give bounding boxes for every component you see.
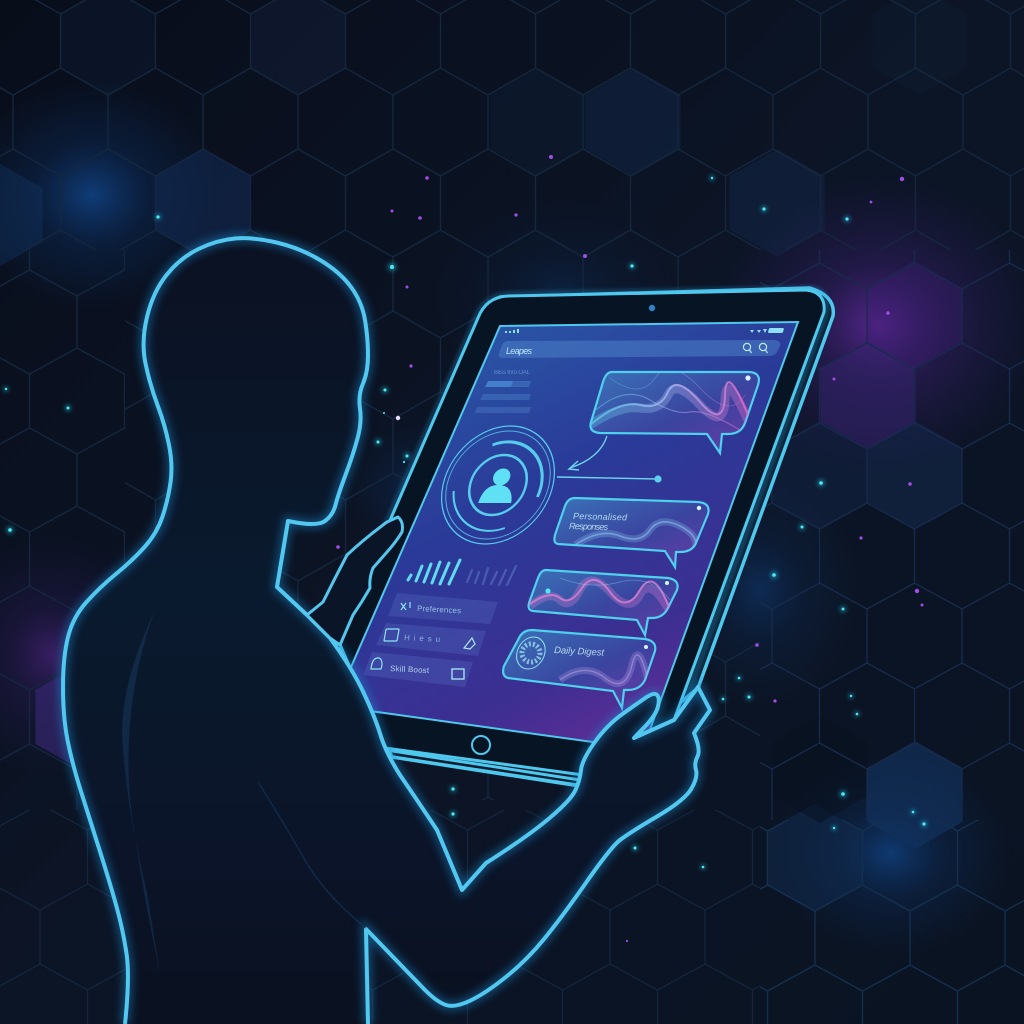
tablet lower edge <box>386 750 580 785</box>
chat bubble: pink wave <box>529 570 678 635</box>
profile dial with user icon <box>430 426 566 544</box>
screen <box>334 322 798 749</box>
body contour lines <box>122 610 366 973</box>
tablet outer glow <box>338 290 825 712</box>
tablet bezel <box>338 290 824 775</box>
arrow from bubble to dial <box>569 436 607 470</box>
menu row: skill boost: Skill Boost <box>390 664 430 675</box>
chat bubble: personalised responses: Responses <box>569 521 609 532</box>
particles <box>4 155 927 942</box>
bar chart <box>408 560 516 585</box>
chat bubble: daily digest <box>503 630 655 708</box>
tablet <box>334 288 833 786</box>
search bar <box>498 340 780 358</box>
silhouette glow <box>63 238 710 1024</box>
chat bubble: personalised responses <box>554 498 709 567</box>
menu row: skill boost <box>363 652 473 687</box>
chat bubble: daily digest: Daily Digest <box>554 645 605 659</box>
camera <box>649 305 655 311</box>
status bar <box>505 328 784 333</box>
connector line with dot <box>557 475 662 483</box>
home button <box>472 736 490 754</box>
menu row: health <box>376 623 486 656</box>
menu row: preferences: Preferences <box>417 604 461 615</box>
left hand <box>307 517 402 645</box>
silhouette outline <box>63 238 710 1024</box>
chat bubble: wave <box>590 369 759 453</box>
silhouette body <box>63 238 710 1024</box>
menu row: health: Hiesu <box>404 633 440 644</box>
person silhouette <box>63 238 710 1024</box>
chat bubble: personalised responses: Personalised <box>573 511 628 522</box>
search bar: Leapes <box>506 346 532 356</box>
side text lines: Bliss thro OAL <box>494 370 531 376</box>
side text lines <box>475 370 531 413</box>
tablet back edge <box>340 288 833 786</box>
menu row: preferences <box>388 593 498 624</box>
